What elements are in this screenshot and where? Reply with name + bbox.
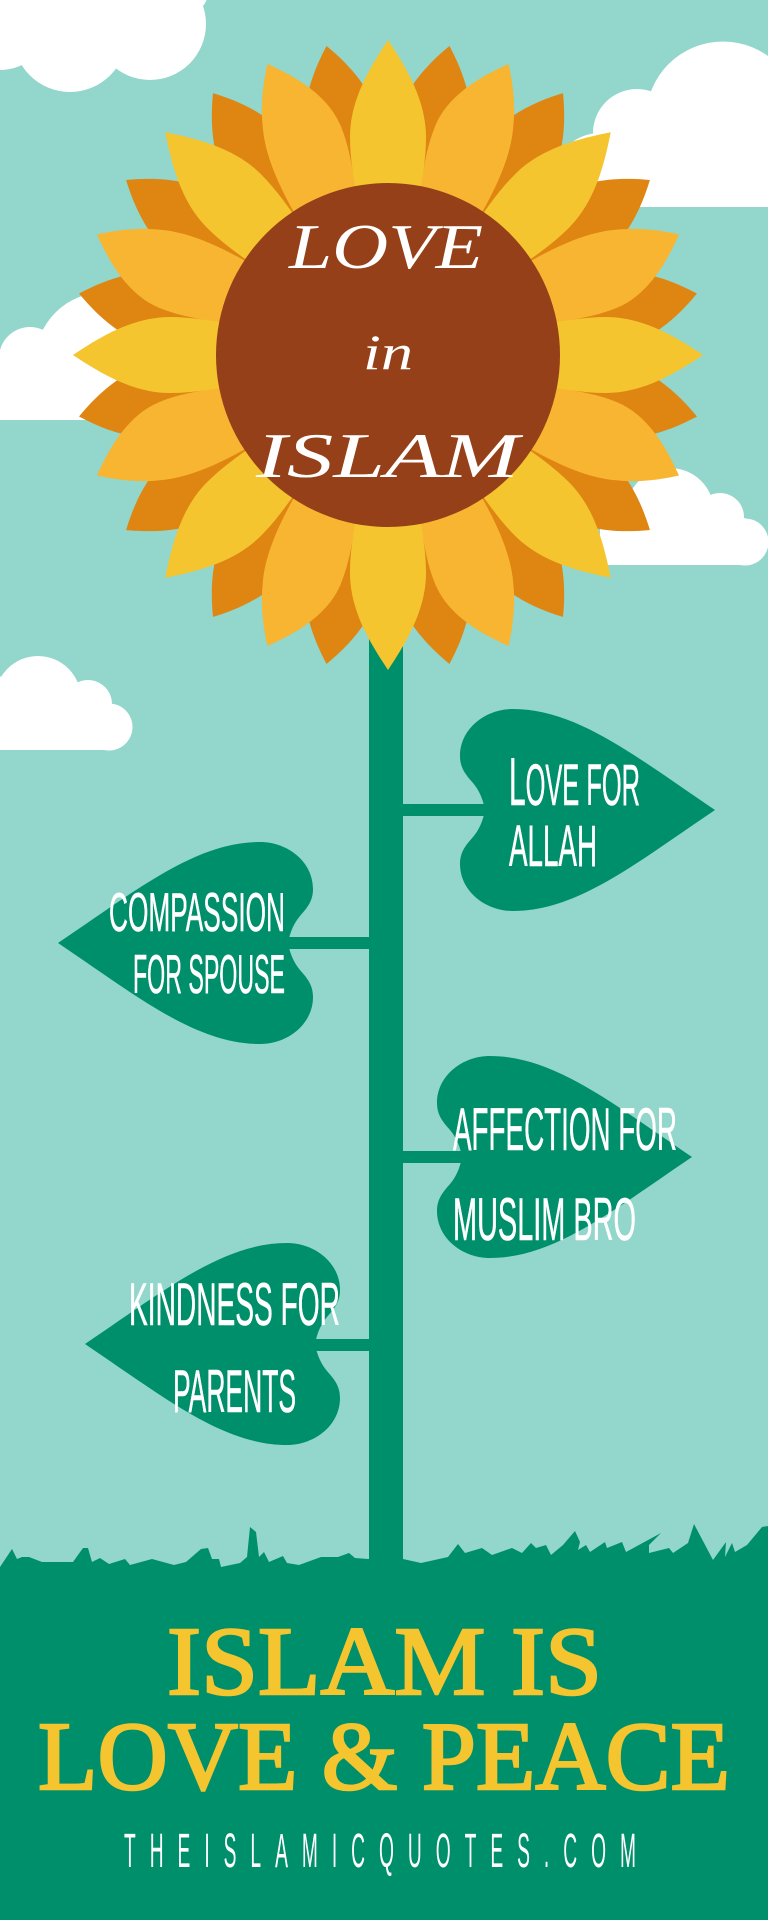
website: THEISLAMICQUOTES.COM [124, 1824, 636, 1878]
branch and leaf: love for Allah [402, 709, 715, 911]
stem [369, 600, 403, 1580]
flower title [255, 211, 524, 491]
headline: LOVE & PEACE [38, 1703, 730, 1811]
cloud: middle left [0, 296, 117, 420]
headline: ISLAM IS [167, 1608, 602, 1716]
cloud: top left [0, 0, 210, 92]
grass ground [0, 1524, 768, 1920]
cloud: top right [553, 42, 768, 227]
branch and leaf: kindness for parents: PARENTS [173, 1358, 296, 1425]
sunflower [72, 39, 704, 671]
cloud: middle right [600, 468, 768, 566]
branch and leaf: compassion for spouse [58, 842, 370, 1044]
branch and leaf: compassion for spouse: FOR SPOUSE [133, 943, 285, 1005]
headline [38, 1608, 730, 1811]
branch and leaf: kindness for parents [85, 1243, 370, 1445]
branch and leaf: kindness for parents: KINDNESS FOR [129, 1271, 340, 1338]
branch and leaf: love for Allah: ALLAH [509, 814, 597, 879]
flower title: LOVE [288, 211, 483, 282]
branch and leaf: affection for Muslim bro [402, 1056, 692, 1258]
flower title: ISLAM [255, 420, 524, 491]
branch and leaf: compassion for spouse: COMPASSION [109, 881, 285, 943]
flower title: in [363, 324, 413, 380]
cloud: lower left [0, 656, 132, 750]
